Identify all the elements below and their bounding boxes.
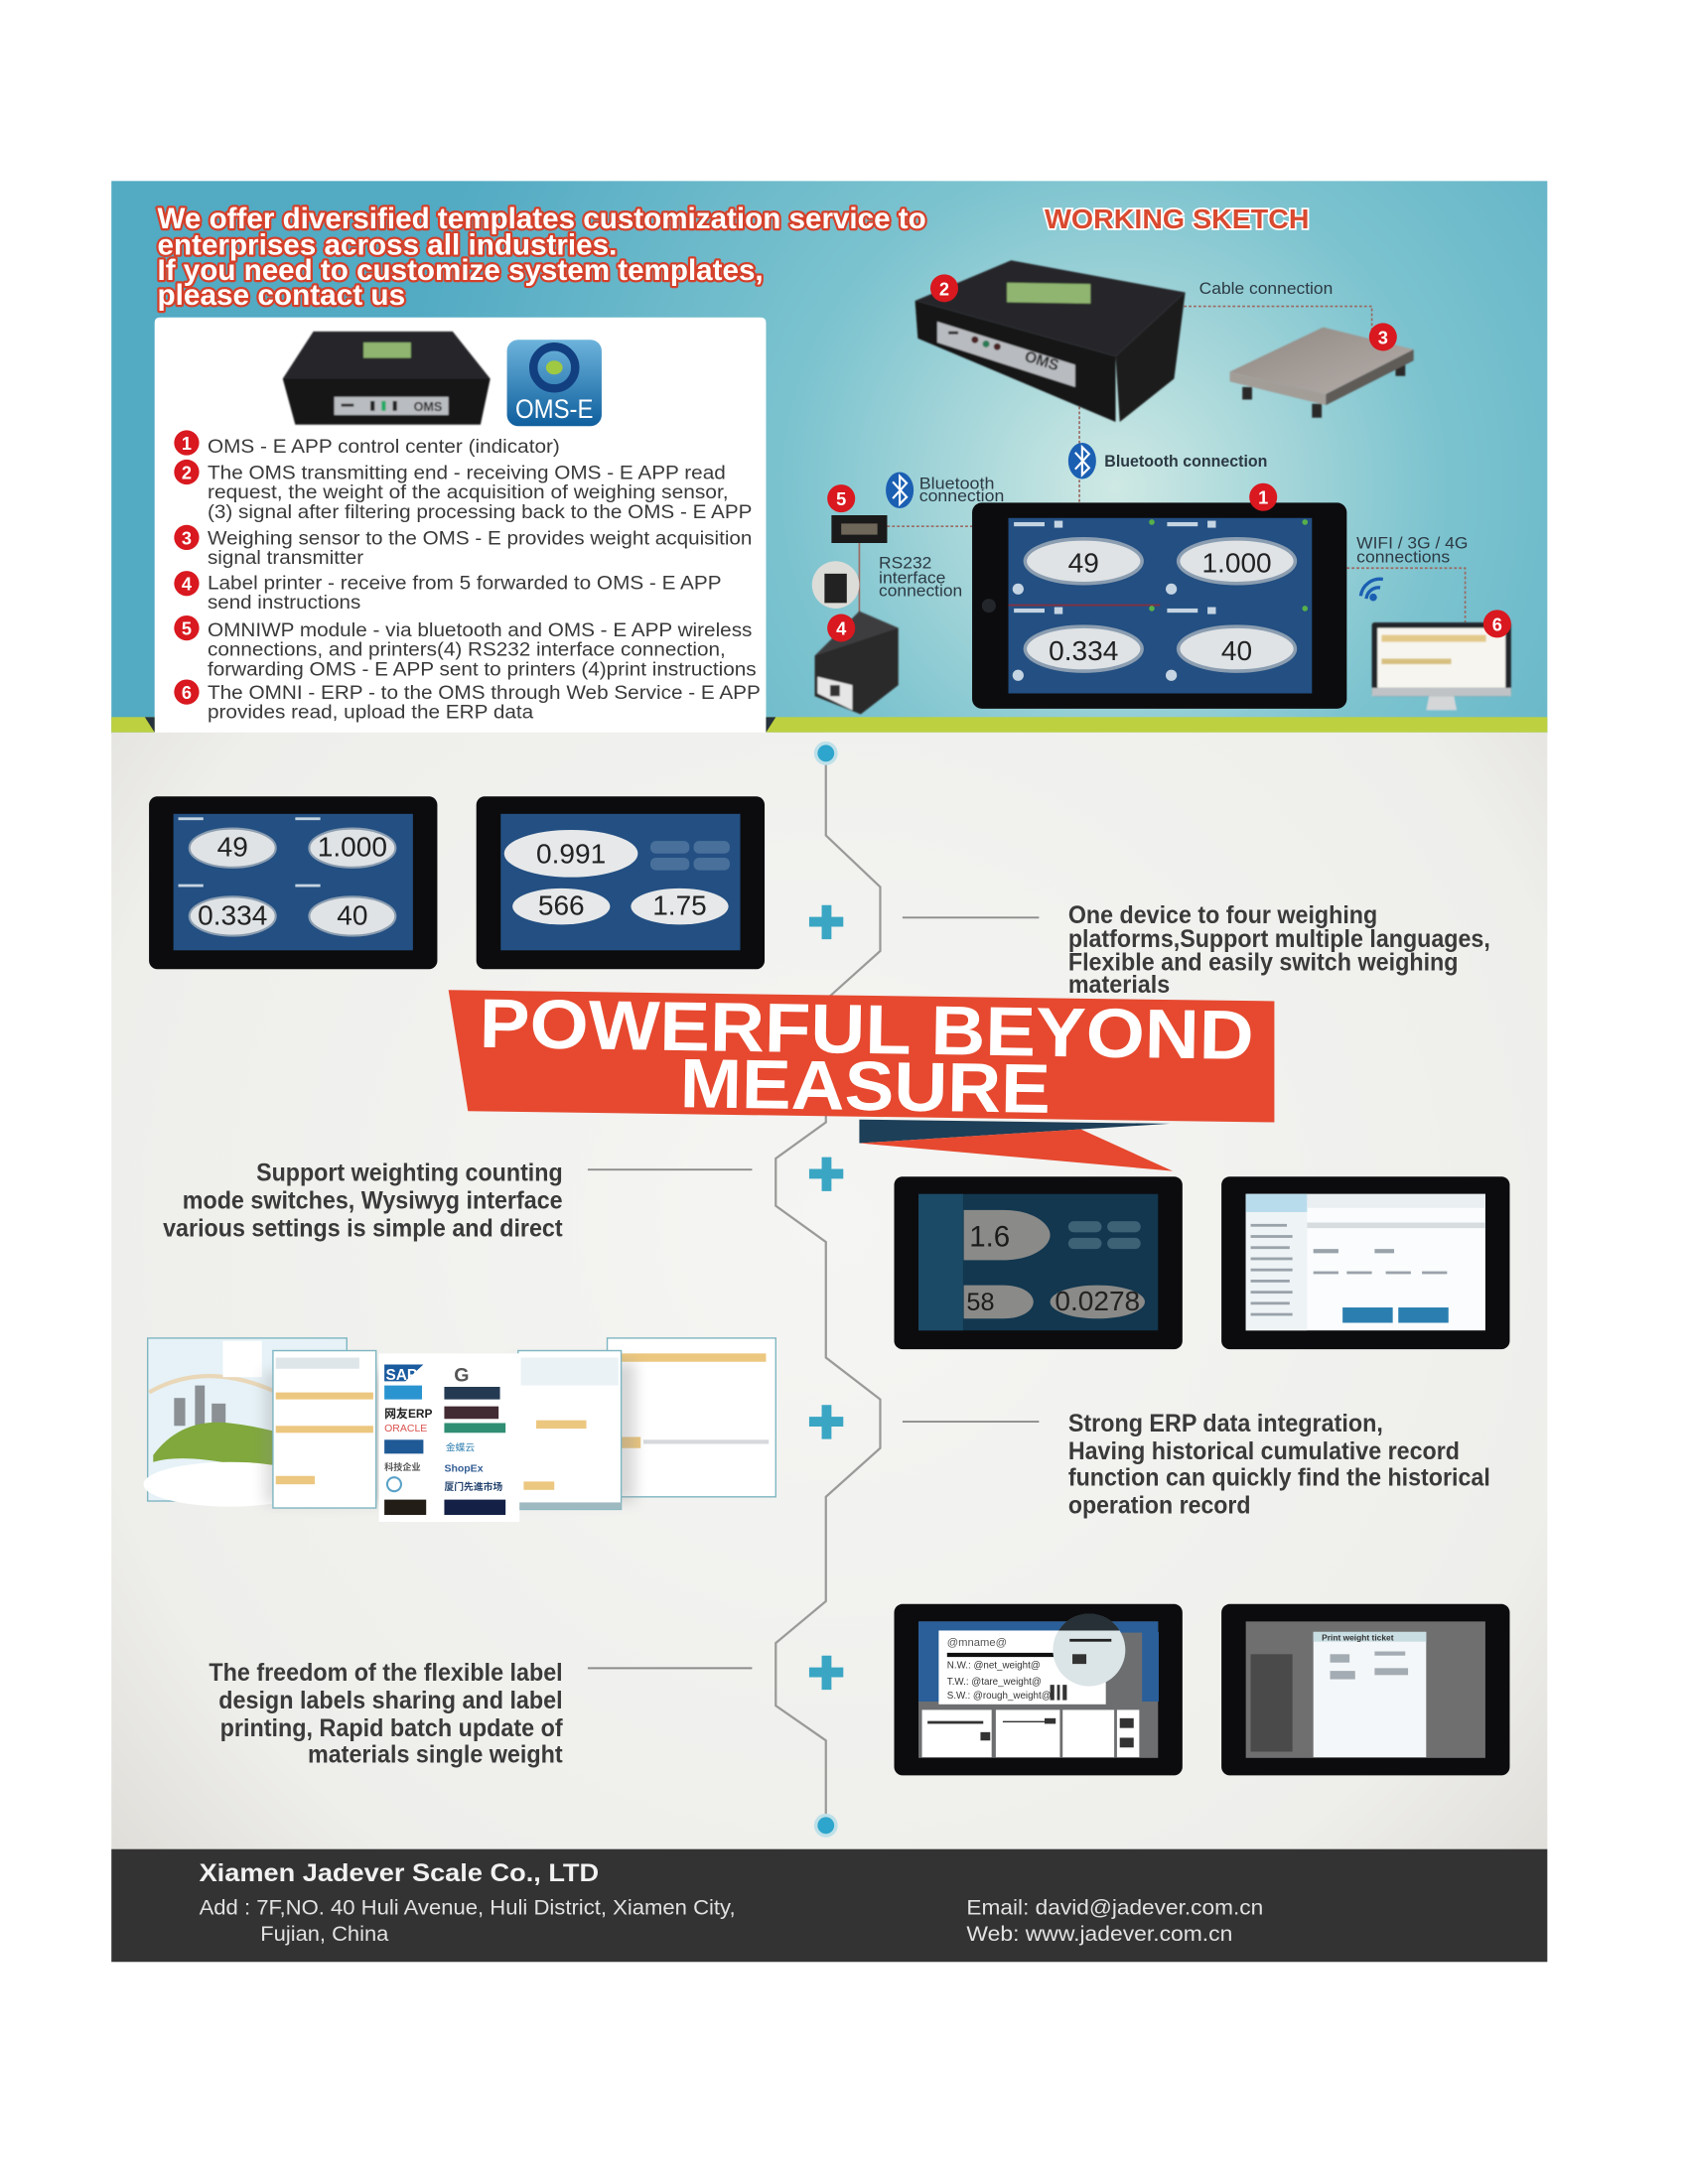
label: wifi connections: WIFI / 3G / 4G: [1356, 534, 1468, 553]
device: cable connector: [812, 561, 859, 609]
window: list two: [509, 1351, 635, 1509]
marker 4: 4: [836, 618, 847, 639]
item 2: [174, 460, 752, 523]
window: list right far: [608, 1338, 775, 1497]
tablet: three displays: 566: [538, 890, 585, 921]
device: platform scale: [1230, 328, 1414, 418]
text: feature four: materials single weight: [308, 1741, 563, 1769]
item 1: OMS - E APP control center (indicator): [208, 436, 560, 458]
address: [200, 1897, 736, 1946]
marker 3: 3: [1378, 327, 1388, 347]
text: feature two: mode switches, Wysiwyg interface: [183, 1186, 563, 1214]
ERP brand logos: ShopEx: [444, 1463, 484, 1475]
ERP brand logos: G: [454, 1364, 470, 1386]
item 4: send instructions: [208, 592, 360, 614]
item 2: The OMS transmitting end - receiving OMS - E APP read: [208, 462, 726, 483]
item 4: [174, 571, 722, 614]
marker 2: 2: [939, 278, 949, 299]
icon: OMS box: [283, 332, 491, 425]
device: OMS transmitter: OMS: [1023, 348, 1060, 374]
device: main tablet with four displays: 1.000: [1201, 547, 1272, 578]
tablet: label design: @mname@: [947, 1637, 1007, 1649]
item 5: OMNIWP module - via bluetooth and OMS - E APP wireless: [208, 619, 753, 641]
item 6: The OMNI - ERP - to the OMS through Web Service - E APP: [208, 682, 761, 704]
text: feature two: [163, 1159, 563, 1243]
item 3: signal transmitter: [208, 547, 364, 569]
tablet: three displays: 0.991: [536, 839, 606, 870]
text: feature one: Flexible and easily switch weighing: [1068, 949, 1459, 977]
banner: powerful beyond measure: POWERFUL BEYOND: [479, 985, 1254, 1074]
graphic: ERP collage: [143, 1338, 775, 1522]
timeline spine: [775, 764, 880, 1816]
tablet: four displays: 1.000: [318, 832, 387, 863]
item 6: provides read, upload the ERP data: [208, 702, 533, 724]
item 3: Weighing sensor to the OMS - E provides weight acquisition: [208, 527, 752, 549]
tablet: counting mode: 58: [966, 1289, 995, 1316]
item 6: 6: [182, 682, 192, 703]
marker 3: [1369, 323, 1397, 350]
device: bluetooth module: [831, 515, 887, 543]
plus icons: [809, 905, 843, 1690]
ERP brand logos: SAP: [386, 1367, 417, 1384]
label: bluetooth connection left: Bluetooth: [919, 474, 994, 492]
legend list: [174, 430, 761, 724]
heading: working sketch: WORKING SKETCH: [1045, 204, 1309, 234]
tablet: counting mode: 1.6: [969, 1220, 1010, 1253]
heading: customization offer: If you need to customize system templates,: [157, 254, 764, 287]
heading: customization offer: We offer diversified templates customization service to: [157, 203, 926, 235]
marker 5: 5: [836, 488, 846, 509]
ERP brand logos: 厦门先進市场: [444, 1480, 502, 1493]
address: Add : 7F,NO. 40 Huli Avenue, Huli District, Xiamen City,: [200, 1897, 736, 1920]
item 3: [174, 525, 752, 569]
device: main tablet with four displays: 0.334: [1049, 635, 1118, 666]
marker 2: [930, 274, 958, 302]
banner: powerful beyond measure: [449, 985, 1274, 1171]
device: main tablet with four displays: 40: [1221, 635, 1252, 666]
item 4: 4: [182, 574, 193, 595]
panel: legend card: [145, 318, 775, 734]
device: label printer: [815, 612, 899, 715]
text: feature four: printing, Rapid batch update of: [220, 1714, 563, 1742]
tablet: three displays: 1.75: [652, 890, 707, 921]
item 1: 1: [182, 433, 192, 454]
icon: bluetooth: [1068, 443, 1096, 478]
item 2: 2: [182, 462, 192, 482]
ERP brand logos: ORACLE: [384, 1423, 427, 1434]
tablet: label design: [894, 1604, 1183, 1775]
device: OMS transmitter: [915, 260, 1186, 422]
label: wifi connections: connections: [1356, 548, 1450, 567]
tablet: label design: T.W.: @tare_weight@: [947, 1677, 1042, 1688]
heading: customization offer: please contact us: [157, 279, 405, 312]
address: Fujian, China: [260, 1923, 389, 1946]
item 5: forwarding OMS - E APP sent to printers (4)print instructions: [208, 658, 757, 680]
text: feature one: [1068, 901, 1490, 999]
icon: OMS-E app: [507, 340, 602, 426]
tablet: four displays: [149, 796, 437, 969]
label: bluetooth connection: Bluetooth connection: [1104, 452, 1267, 471]
item 3: 3: [182, 527, 192, 548]
icon: wifi: [1360, 579, 1383, 600]
device: main tablet with four displays: 49: [1068, 547, 1099, 578]
tablet: three displays: [477, 796, 765, 969]
text: feature four: The freedom of the flexible label: [209, 1659, 563, 1687]
tablet: label design: N.W.: @net_weight@: [947, 1660, 1041, 1671]
item 6: [174, 679, 761, 724]
panel: features section: [111, 733, 1547, 1849]
tablet: ticket dialog: [1221, 1604, 1509, 1775]
ERP brand logos: 科技企业: [384, 1461, 421, 1472]
text: feature three: Strong ERP data integration,: [1068, 1410, 1383, 1437]
ERP brand logos: 网友ERP: [384, 1407, 432, 1421]
text: feature one: materials: [1068, 971, 1170, 999]
label: bluetooth connection left: [919, 474, 1004, 505]
marker 1: 1: [1258, 487, 1268, 508]
label: bluetooth connection left: connection: [919, 486, 1004, 505]
contact: Email: david@jadever.com.cn: [966, 1897, 1263, 1920]
item 5: connections, and printers(4) RS232 interface connection,: [208, 639, 726, 661]
text: feature four: design labels sharing and label: [218, 1687, 563, 1714]
text: feature two: Support weighting counting: [256, 1159, 563, 1186]
heading: customization offer: enterprises across all industries.: [157, 229, 617, 262]
tablet: counting mode: [894, 1176, 1183, 1349]
marker 4: [827, 614, 855, 642]
text: feature three: function can quickly find the historical: [1068, 1464, 1490, 1492]
text: feature two: various settings is simple and direct: [163, 1215, 563, 1243]
item 2: (3) signal after filtering processing back to the OMS - E APP: [208, 501, 752, 523]
heading: customization offer: [157, 203, 926, 312]
text: feature three: [1068, 1410, 1490, 1520]
tablet: counting mode: 0.0278: [1055, 1286, 1140, 1316]
text: feature three: operation record: [1068, 1492, 1251, 1520]
text: feature one: One device to four weighing: [1068, 901, 1377, 929]
label: cable connection: Cable connection: [1199, 279, 1333, 298]
panel: footer: [111, 1849, 1547, 1962]
tablet: ticket dialog: Print weight ticket: [1322, 1632, 1394, 1642]
tablet: four displays: 0.334: [198, 899, 267, 930]
contact: Web: www.jadever.com.cn: [966, 1923, 1232, 1946]
company name: Xiamen Jadever Scale Co., LTD: [200, 1859, 599, 1887]
timeline dot top: [814, 742, 838, 765]
connector lines: [588, 917, 1039, 1668]
banner: powerful beyond measure: MEASURE: [679, 1044, 1052, 1128]
text: feature one: platforms,Support multiple languages,: [1068, 925, 1490, 953]
marker 1: [1249, 483, 1277, 511]
icon: OMS-E app: OMS-E: [515, 394, 594, 424]
item 5: [174, 615, 757, 680]
device: main tablet with four displays: [972, 502, 1346, 709]
label: rs232: RS232: [879, 553, 931, 572]
green base strip: [111, 717, 1547, 733]
window: cityscape: [143, 1338, 347, 1507]
label: rs232: interface: [879, 569, 945, 588]
tablet: four displays: 40: [337, 899, 367, 930]
timeline dot bottom: [814, 1814, 838, 1838]
text: feature three: Having historical cumulative record: [1068, 1437, 1460, 1465]
item 4: Label printer - receive from 5 forwarded to OMS - E APP: [208, 572, 722, 594]
marker 6: 6: [1492, 614, 1502, 634]
tablet: label design: S.W.: @rough_weight@: [947, 1691, 1052, 1702]
label: wifi connections: [1356, 534, 1468, 567]
window: list one: [265, 1351, 387, 1508]
panel: working sketch blue section: [111, 181, 1547, 734]
label: rs232: [879, 553, 962, 600]
icon: bluetooth left: [886, 472, 914, 508]
ERP brand logos: 金蝶云: [446, 1441, 475, 1454]
marker 6: [1483, 610, 1511, 637]
item 1: [174, 430, 560, 458]
label: rs232: connection: [879, 581, 962, 600]
ERP brand logos: [379, 1353, 519, 1522]
item 5: 5: [182, 618, 192, 639]
device: monitor: [1372, 622, 1511, 710]
tablet: four displays: 49: [217, 832, 248, 863]
item 2: request, the weight of the acquisition of weighing sensor,: [208, 481, 729, 503]
tablet: settings screen: [1221, 1176, 1509, 1349]
icon: OMS box: OMS: [414, 400, 442, 414]
connection lines: [859, 307, 1466, 622]
marker 5: [827, 484, 855, 512]
text: feature four: [209, 1659, 563, 1769]
contact: [966, 1897, 1263, 1946]
